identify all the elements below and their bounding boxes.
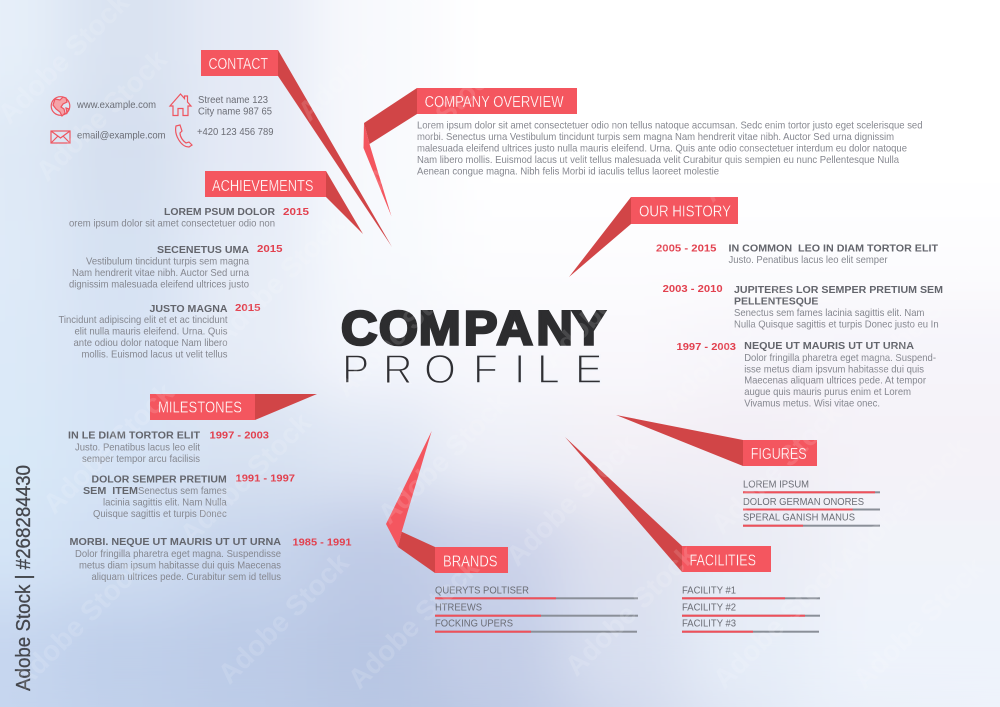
history item 2: 2003 - 2010 (663, 284, 723, 295)
milestone item 3: MORBI. NEQUE UT MAURIS UT UT URNA (70, 537, 281, 548)
icon: house (170, 94, 191, 116)
achievement item 2: dignissim malesuada eleifend ultrices justo (69, 280, 249, 290)
overview body text: Lorem ipsum dolor sit amet consectetuer odio non tellus natoque accumsan. Sedc enim tortor justo eget scelerisque sed (417, 121, 923, 132)
milestone item 2: lacinia sagittis elit. Nam Nulla (103, 498, 227, 508)
milestone item 1: semper tempor arcu facilisis (82, 454, 200, 465)
milestone item 2: 1991 - 1997 (236, 473, 295, 484)
watermarks: Adobe Stock (37, 377, 180, 520)
achievement item 2: Nam hendrerit vitae nibh. Auctor Sed urna (72, 268, 249, 279)
watermarks: Adobe Stock (832, 432, 975, 575)
history item 2: Nulla Quisque sagittis et turpis Donec justo eu In (734, 320, 939, 330)
brands bar 3: FOCKING UPERS (435, 618, 513, 630)
panel: milestones (68, 394, 352, 583)
watermarks: Adobe Stock (847, 252, 990, 395)
watermarks: Adobe Stock (342, 552, 485, 695)
website text: www.example.com (76, 100, 156, 111)
watermarks: Adobe Stock (486, 109, 629, 252)
watermarks: Adobe Stock (705, 397, 848, 540)
achievement item 3: elit nulla mauris eleifend. Urna. Quis (74, 326, 228, 338)
facilities heading (682, 546, 771, 572)
achievement item 3: mollis. Euismod lacus ut velit tellus (82, 350, 228, 360)
history item 1 (656, 244, 938, 266)
facilities heading: FACILITIES (690, 553, 756, 570)
history heading: OUR HISTORY (639, 204, 731, 221)
figures bar 1 (743, 479, 880, 493)
milestones pointer (255, 394, 317, 420)
panel: figures (616, 415, 880, 527)
watermarks: Adobe Stock (7, 552, 150, 695)
achievement item 1: 2015 (283, 207, 310, 218)
contact heading (201, 50, 278, 76)
address text: City name 987 65 (198, 106, 272, 118)
achievement item 2 (69, 244, 283, 290)
milestone item 2: DOLOR SEMPER PRETIUM (92, 474, 227, 485)
history item 3: Vivamus metus. Wisi vitae onec. (744, 398, 880, 409)
history item 2: PELLENTESQUE (734, 296, 819, 308)
facilities bar 2 (682, 603, 820, 617)
title word: company: COMPANY (341, 302, 606, 355)
brands bar 2: HTREEWS (435, 603, 482, 614)
figures bar 3 (743, 513, 880, 527)
brands heading (435, 547, 508, 573)
overview body text: Aenean congue magna. Nibh felis Morbi id iaculis tellus laoreet molestie (417, 166, 719, 178)
achievements heading (205, 171, 326, 197)
history item 3: Maecenas aliquam ultrices pede. At tempor (744, 376, 927, 387)
milestone item 1: 1997 - 2003 (210, 430, 269, 441)
title (342, 310, 608, 383)
figures bar 3: SPERAL GANISH MANUS (743, 513, 855, 524)
achievement item 1 (69, 207, 310, 230)
panel: brands (386, 431, 638, 633)
address text (198, 95, 272, 118)
milestone item 2: Senectus sem fames (138, 486, 227, 497)
history item 3: Dolor fringilla pharetra eget magna. Suspend- (744, 353, 936, 364)
history item 2 (663, 284, 943, 330)
watermarks: Adobe Stock (372, 387, 515, 530)
icon: phone (176, 125, 192, 147)
watermarks: Adobe Stock (362, 54, 505, 197)
watermarks: Adobe Stock (329, 260, 472, 403)
achievement item 2: Vestibulum tincidunt turpis sem magna (86, 257, 249, 268)
milestone item 1: IN LE DIAM TORTOR ELIT (68, 431, 200, 442)
milestone item 1 (68, 430, 269, 465)
history item 1: 2005 - 2015 (656, 244, 717, 255)
brands pointer fold: dark (398, 532, 435, 573)
facilities bar 3 (682, 618, 819, 633)
email text: email@example.com (77, 131, 166, 142)
watermarks: Adobe Stock (559, 539, 702, 682)
watermarks: Adobe Stock (174, 407, 317, 550)
facilities pointer (565, 437, 682, 572)
watermarks: Adobe Stock (536, 230, 679, 373)
facilities bar 3: FACILITY #3 (682, 618, 736, 630)
figures bar 1: LOREM IPSUM (743, 479, 809, 490)
achievement item 3: 2015 (235, 303, 261, 314)
panel: our history (569, 197, 943, 409)
title word: profile: PROFILE (342, 346, 602, 392)
achievement item 2: SECENETUS UMA (157, 245, 249, 256)
watermarks: Adobe Stock (707, 552, 850, 695)
watermarks: Adobe Stock (500, 429, 643, 572)
overview body text (417, 121, 923, 178)
icon: envelope (51, 131, 70, 143)
facilities bar 1 (682, 585, 820, 599)
milestone item 3 (70, 537, 352, 583)
brands bar 1: QUERYTS POLTISER (435, 585, 529, 596)
watermarks: Adobe Stock (847, 552, 990, 695)
achievement item 1: orem ipsum dolor sit amet consectetuer odio non (69, 219, 275, 230)
facilities bar 1: FACILITY #1 (682, 585, 736, 596)
watermarks: Adobe Stock (212, 547, 355, 690)
brands heading: BRANDS (443, 554, 498, 571)
milestone item 3: metus diam ipsum habitasse dui quis Maecenas (79, 560, 281, 572)
history item 3: augue quis mauris purus enim et Lorem (744, 387, 911, 398)
contact heading: CONTACT (208, 56, 268, 73)
history heading (631, 197, 738, 224)
history item 3: NEQUE UT MAURIS UT UT URNA (744, 341, 914, 352)
milestone item 3: Dolor fringilla pharetra eget magna. Suspendisse (75, 549, 281, 560)
overview body text: malesuada eleifend ultrices justo nulla mauris eleifend. Urna. Quis ante odio consectetuer interdum eu dolor natoque (417, 144, 907, 154)
contact pointer (278, 50, 392, 247)
history item 3: isse metus diam ipsvum habitasse dui quis (744, 364, 924, 375)
achievements heading: ACHIEVEMENTS (212, 178, 314, 195)
milestone item 2 (83, 473, 295, 520)
watermarks: Adobe Stock (207, 209, 350, 352)
history pointer (569, 197, 631, 277)
overview pointer fold: light (364, 123, 392, 216)
achievement item 3: ante odiou dolor natoque Nam libero (74, 338, 228, 349)
achievement item 1: LOREM PSUM DOLOR (164, 207, 276, 218)
icon: globe (51, 97, 70, 116)
stock id label: Adobe Stock | #268284430 (13, 465, 35, 691)
history item 3: 1997 - 2003 (676, 342, 736, 353)
milestone item 2: Quisque sagittis et turpis Donec (93, 509, 227, 520)
milestones heading: MILESTONES (158, 400, 242, 417)
history item 1: IN COMMON LEO IN DIAM TORTOR ELIT (728, 244, 938, 254)
achievement item 3 (58, 303, 261, 360)
overview heading: COMPANY OVERVIEW (425, 94, 564, 111)
milestones heading (150, 394, 255, 420)
phone text: +420 123 456 789 (197, 127, 274, 138)
milestone item 3: aliquam ultrices pede. Curabitur sem id tellus (92, 572, 281, 583)
achievements pointer (326, 171, 363, 234)
overview heading (417, 88, 577, 114)
history item 2: Senectus sem fames lacinia sagittis elit. Nam (734, 308, 924, 319)
overview pointer fold: dark (364, 88, 417, 144)
facilities bar 2: FACILITY #2 (682, 603, 736, 614)
figures heading: FIGURES (751, 446, 807, 463)
achievement item 3: JUSTO MAGNA (150, 304, 228, 315)
overview body text: Nam libero mollis. Euismod lacus ut velit tellus malesuada velit Curabitur quis sempien eu nunc Pellentesque Nulla (417, 155, 899, 166)
panel: contact (51, 50, 392, 247)
address text: Street name 123 (198, 95, 268, 106)
milestone item 2: SEM ITEM (83, 486, 138, 497)
watermarks: Adobe Stock (695, 65, 838, 208)
history item 3 (676, 341, 936, 409)
achievement item 2: 2015 (257, 244, 283, 255)
figures pointer (616, 415, 743, 466)
watermarks: Adobe Stock (30, 44, 173, 187)
history item 1: Justo. Penatibus lacus leo elit semper (728, 255, 888, 266)
figures heading (743, 440, 817, 466)
watermarks: Adobe Stock (819, 109, 962, 252)
watermarks: Adobe Stock (657, 274, 800, 417)
overview body text: morbi. Senectus urna Vestibulum tincidunt turpis sem magna Nam hendrerit vitae nibh. Auctor Sed urna dignissim (417, 132, 894, 143)
milestone item 3: 1985 - 1991 (292, 538, 352, 549)
history item 2: JUPITERES LOR SEMPER PRETIUM SEM (734, 285, 943, 296)
panel: achievements (58, 171, 363, 360)
milestone item 1: Justo. Penatibus lacus leo elit (75, 443, 200, 454)
panel: company overview (364, 88, 923, 216)
figures bar 2: DOLOR GERMAN ONORES (743, 497, 864, 508)
brands pointer fold: light (386, 431, 432, 547)
achievement item 3: Tincidunt adipiscing elit et et ac tincidunt (58, 315, 228, 326)
panel: facilities (565, 437, 820, 633)
